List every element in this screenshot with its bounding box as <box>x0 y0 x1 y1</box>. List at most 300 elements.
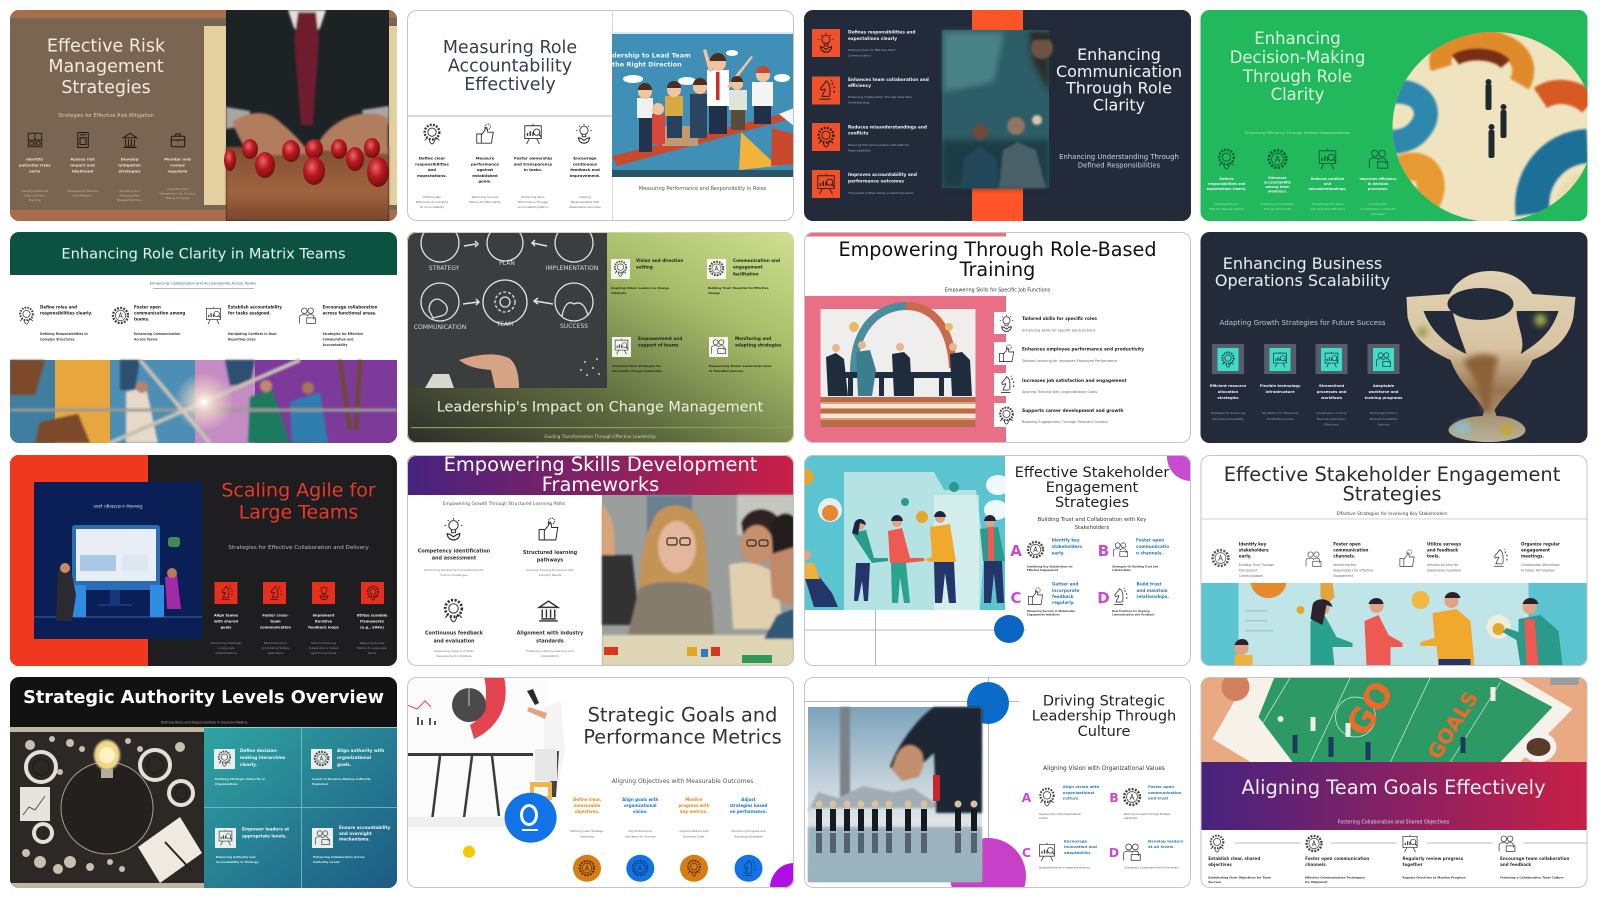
chalkboard image: SUCCESS <box>560 323 588 330</box>
key points: expectations. <box>417 173 447 178</box>
slide: Driving Strategic Leadership Through Culture <box>804 677 1191 900</box>
title: Effectively <box>464 75 556 95</box>
slide: Effective Risk Management Strategies <box>10 10 397 221</box>
key points: culture <box>1063 796 1079 801</box>
key points: Communication and <box>733 258 780 263</box>
icons <box>445 518 558 622</box>
captions: Considerations in Decision <box>1360 207 1396 211</box>
captions: Challenges in Scaling <box>1317 411 1347 415</box>
icons <box>1219 149 1388 169</box>
slide: Leadership's Impact on Change Management <box>407 224 794 443</box>
key points: Gather and <box>1052 582 1078 586</box>
magenta circle accent <box>950 838 1026 900</box>
key points: tools. <box>1427 554 1440 558</box>
key points: Monitoring and <box>735 336 771 341</box>
title: Enhancing Role Clarity in Matrix Teams <box>61 246 346 262</box>
captions <box>416 196 601 208</box>
captions: Scalability Success <box>1267 417 1294 421</box>
key points: measurable <box>574 803 600 808</box>
captions: Collaboration <box>1112 568 1131 572</box>
subtitle: Guiding Transformation Through Effective Leadership <box>544 434 656 439</box>
captions: Building Trust: Essential for Effective <box>708 286 769 290</box>
key points <box>848 30 929 184</box>
captions: Monitoring Progress and <box>732 829 766 833</box>
captions <box>611 286 771 373</box>
key points: allocation <box>1218 390 1239 394</box>
title: Through Role <box>1065 78 1172 98</box>
captions: Effectively <box>1324 422 1339 426</box>
captions: Risk Mitigation <box>73 194 93 198</box>
captions: Aligning Training with Organizational Goals <box>1022 390 1097 394</box>
captions: The Impact of Role Clarity on Team Dynamics <box>847 191 914 195</box>
key points: setting <box>636 264 653 270</box>
captions: Successful Change Leadership <box>612 369 662 373</box>
slide: Enhancing Decision-Making Through Role Clarity <box>1200 10 1590 225</box>
subtitle: Empowering Skills for Specific Job Functions <box>945 288 1051 294</box>
key points: early. <box>1052 550 1065 556</box>
icons <box>425 124 592 144</box>
key points: making hierarchies <box>240 755 286 760</box>
key points: processes. <box>1368 187 1388 191</box>
key points: responsibilities <box>415 161 450 166</box>
key points: Establish accountability <box>228 304 282 310</box>
globe badge <box>505 793 557 843</box>
key points: Define clear <box>419 156 445 160</box>
key points: efficiency <box>848 83 871 89</box>
captions <box>215 777 371 864</box>
key points: and <box>428 167 436 172</box>
captions: Responsibilities <box>848 148 871 152</box>
letters: C <box>1010 589 1022 607</box>
key points: conflicts <box>848 131 869 137</box>
key points: among team <box>1266 185 1290 189</box>
key points: Foster open <box>134 304 161 310</box>
key points: Defines responsibilities and <box>848 30 915 36</box>
icon tiles <box>812 29 840 198</box>
key points: Continuous feedback <box>425 630 484 636</box>
subtitle: Building Trust and Collaboration with Key <box>1038 517 1146 523</box>
title: Operations Scalability <box>1215 271 1390 290</box>
captions: Responsibilities with <box>571 200 599 204</box>
illustration: goals football pitch: GO <box>1338 674 1403 744</box>
captions <box>1238 563 1560 578</box>
captions: Catalysts <box>611 291 626 295</box>
key points: Streamlined <box>1319 384 1345 388</box>
letters: D <box>1097 589 1110 607</box>
captions: in Large Agile <box>217 646 235 650</box>
key points: channels. <box>1333 554 1356 558</box>
icon tiles <box>214 582 384 604</box>
key points: Empower leaders at <box>242 826 289 832</box>
key points: innovation and <box>1064 844 1097 849</box>
captions: Performance Through <box>518 200 548 204</box>
slide: Enhancing Role Clarity in Matrix Teams <box>10 232 397 443</box>
key points: at all levels <box>1148 844 1174 849</box>
key points: Enhances <box>1268 176 1287 180</box>
letters: B <box>1109 790 1119 805</box>
title: Aligning Team Goals Effectively <box>1241 776 1546 799</box>
captions: Change <box>708 291 720 295</box>
title: Enhancing <box>1077 45 1161 64</box>
subtitle: Enhancing Collaboration and Accountability Across Teams <box>150 282 256 286</box>
key points: continuous <box>573 161 598 166</box>
subtitle: Empowering Growth Through Structured Learning Paths <box>443 501 566 507</box>
icons <box>219 751 330 845</box>
key points: regularly. <box>1052 600 1075 605</box>
captions: with Clear Role Definitions <box>1310 207 1346 211</box>
key points: stakeholders <box>1052 544 1083 549</box>
key points: Encourage <box>573 156 597 160</box>
key points: team <box>270 620 281 624</box>
captions: Enhancing Skills for Specific Job Functions <box>1022 328 1096 332</box>
captions: Management Plans <box>117 198 143 202</box>
key points: Alignment with industry <box>517 630 584 636</box>
key points: frameworks <box>360 620 384 624</box>
key points: meetings. <box>1521 554 1544 558</box>
key points: feedback loops <box>308 626 339 630</box>
captions: Measuring Impact of Skills <box>434 649 474 653</box>
key points: Adjust <box>741 797 756 802</box>
captions: Cultivating a Collaborative Work Environment <box>1124 866 1179 870</box>
key points: Develop leaders <box>1148 838 1184 844</box>
key points: Reduces conflicts <box>1311 177 1344 181</box>
key points: objectives. <box>575 809 600 814</box>
key points: strategies based <box>730 803 768 808</box>
title: Strategic Authority Levels Overview <box>23 688 384 708</box>
title: Strategies <box>61 78 151 98</box>
key points: in tasks. <box>524 167 543 172</box>
captions: Building Trust Through <box>1239 563 1274 567</box>
key points <box>636 258 782 348</box>
captions: Aligning Training Programs with <box>526 568 574 572</box>
captions: Fostering Lifelong Learning and <box>526 649 574 653</box>
blue circle accent <box>967 682 1009 724</box>
icons <box>221 586 378 600</box>
key points: relationships. <box>1136 594 1169 599</box>
key points: Establish clear, shared <box>1208 856 1260 861</box>
captions: Inspiring Vision: Leaders as Change <box>611 286 669 290</box>
caption: Measuring Performance and Responsibility in Roles <box>639 186 767 192</box>
captions: Tailored Learning for Improved Employee Performance <box>1021 359 1117 363</box>
captions: Defining Roles for Effective Team <box>848 48 896 52</box>
captions: Industry Needs <box>539 573 562 577</box>
photo: team at table <box>602 495 794 666</box>
captions: Communication Strategies for <box>612 364 661 368</box>
key points: clearly. <box>240 762 257 767</box>
key points: early <box>29 168 41 173</box>
letters: B <box>1098 542 1109 560</box>
captions <box>1208 876 1564 884</box>
captions: Navigating Conflicts in Dual <box>228 332 277 336</box>
captions: Indicators for Success <box>625 834 656 838</box>
captions: Business Goals <box>683 834 705 838</box>
captions: Planning <box>29 198 41 202</box>
key points: Assess risk <box>70 156 95 162</box>
captions: Involving Role <box>1369 202 1388 206</box>
trophy-shaped photo <box>1406 271 1576 442</box>
captions <box>1027 564 1158 616</box>
key points: Utilize surveys <box>1427 542 1462 546</box>
title: Accountability <box>448 56 572 76</box>
key points: Define decision- <box>240 748 278 753</box>
key points: against <box>477 167 493 172</box>
captions: Adjusting Strategies <box>734 834 763 838</box>
key points: stakeholders <box>1239 548 1269 552</box>
captions: Measuring Success in Stakeholder <box>1027 609 1076 613</box>
key points: Foster open <box>1333 542 1361 546</box>
captions: Utilizing Surveys for <box>1427 563 1459 567</box>
key points: organizational <box>337 755 372 760</box>
captions <box>1211 411 1398 426</box>
captions: Communication <box>848 54 871 58</box>
key points: Align authority with <box>337 748 384 753</box>
key points: potential risks <box>19 162 51 167</box>
key points: Flexible technology <box>1260 384 1301 388</box>
key points: mechanisms. <box>339 836 370 842</box>
key points: regularly <box>168 168 188 173</box>
captions <box>1021 328 1117 424</box>
captions: Reporting Lines <box>228 338 256 342</box>
captions <box>211 641 387 655</box>
key points <box>19 158 190 173</box>
captions: Engagement Initiatives <box>1027 612 1060 616</box>
key points <box>1239 542 1560 558</box>
captions: Enhancing Team <box>522 195 545 199</box>
captions: Establishing Clear Objectives for Team <box>1208 876 1271 880</box>
key points: progress with <box>678 803 710 808</box>
title: Empowering Through Role-Based <box>838 238 1157 261</box>
key points: Defines <box>1219 177 1234 181</box>
key points: Foster open communication <box>1305 856 1369 861</box>
captions: in Transition Success <box>709 369 744 373</box>
key points: Organize regular <box>1521 542 1560 546</box>
icons <box>1213 549 1507 566</box>
key points: training programs <box>1365 396 1403 400</box>
captions: to Foster Participation <box>1521 568 1555 572</box>
key points: workflows <box>1321 396 1343 400</box>
key points: likelihood <box>72 168 93 173</box>
captions: Effective Engagement <box>1027 568 1059 572</box>
key points: and maintain <box>1136 588 1168 593</box>
captions: Enhancing Accountability <box>1260 202 1295 206</box>
key points <box>1208 856 1569 867</box>
corner accent <box>1167 433 1215 481</box>
subtitle: Enhancing Efficiency Through Defined Responsibilities <box>1245 130 1350 135</box>
slide: Enhancing Business Operations Scalability <box>1200 232 1588 443</box>
captions: Authority Levels <box>313 860 340 864</box>
captions: Defining Responsibilities in <box>40 332 88 336</box>
icons <box>1222 352 1391 367</box>
title: Clarity <box>1093 96 1145 114</box>
icons <box>1211 835 1515 852</box>
letters: A <box>1010 542 1022 560</box>
key points: Encourage collaboration <box>322 304 378 310</box>
key points: Supports career development and growth <box>1022 408 1123 414</box>
key points: Identify <box>26 156 44 162</box>
key points: (e.g., SAFe) <box>360 626 384 630</box>
captions: Aligning <box>579 195 591 199</box>
title: Scaling Agile for <box>221 480 376 502</box>
key points: performance <box>471 161 499 166</box>
key points: Improves efficiency <box>1359 177 1397 181</box>
image: team on ladders <box>10 360 397 443</box>
slide: Strategic Authority Levels Overview <box>10 677 397 888</box>
image: concept board <box>10 727 204 888</box>
key points: strategies <box>1217 396 1239 400</box>
key points: and transparency <box>514 161 553 166</box>
key points: members. <box>1268 190 1287 194</box>
key points: misunderstandings. <box>1308 187 1347 191</box>
key points: in decision <box>1368 182 1389 186</box>
captions: Best Practices for <box>264 641 288 645</box>
slide: Empowering Through Role-Based Training <box>804 232 1191 443</box>
key points <box>415 156 601 184</box>
key points: Empowerment and <box>638 336 682 341</box>
captions: Agile Teams <box>268 651 284 655</box>
key points: Enhances employee performance and productivity <box>1022 346 1144 352</box>
key points: on performance. <box>730 809 768 814</box>
captions: Metrics for Large Agile <box>357 646 387 650</box>
title: Culture <box>1078 724 1130 740</box>
captions: Complex Structures <box>40 338 75 342</box>
title: Leadership Through <box>1032 708 1176 724</box>
captions: Collaboration in Scaled <box>309 646 339 650</box>
subtitle: Fostering Collaboration and Shared Objectives <box>1338 820 1450 826</box>
key points: responsibilities and <box>1208 182 1246 186</box>
icons <box>818 33 834 194</box>
key points <box>1207 176 1397 194</box>
photo: hands and red spheres <box>224 10 389 221</box>
title: Effective Stakeholder <box>1015 465 1169 481</box>
photo: leader placing red figure <box>808 707 982 882</box>
key points: Improves accountability and <box>848 172 917 178</box>
key points: engagement <box>733 264 763 270</box>
key points: feedback <box>1052 594 1074 599</box>
key points: feedback and <box>570 167 600 172</box>
key points: Align vision with <box>1063 784 1099 789</box>
header <box>10 232 397 275</box>
captions: Business Scalability <box>1370 417 1398 421</box>
key points: standards <box>536 638 564 644</box>
key points: teams. <box>134 316 150 322</box>
key points: and assessment <box>432 556 477 562</box>
key points: Monitor <box>685 797 703 802</box>
key points: across functional areas. <box>322 310 377 316</box>
title: Enhancing <box>1254 29 1341 48</box>
key points: iterative <box>315 620 333 624</box>
title: Communication <box>1056 62 1182 81</box>
captions: Aligning Metrics with <box>679 829 709 833</box>
slide: Empowering Skills Development Frameworks <box>407 453 794 666</box>
captions: Understanding <box>848 100 869 104</box>
key points: incorporate <box>1052 588 1080 593</box>
captions: Reducing Miscommunication with Defined <box>848 143 909 147</box>
captions: Explained <box>312 782 328 786</box>
key points: mitigation <box>118 162 141 167</box>
slide: Effective Stakeholder Engagement Strategies (band) <box>1200 455 1588 666</box>
key points: vision. <box>633 809 648 814</box>
key points: Foster open <box>1136 538 1164 542</box>
captions <box>847 48 914 195</box>
key points: infrastructure <box>1266 390 1295 394</box>
key points: organizational <box>624 803 657 808</box>
key points <box>1022 316 1144 414</box>
key points: Define clear, <box>573 797 601 802</box>
slide: Scaling Agile for Large Teams <box>10 455 397 666</box>
key points: impact and <box>70 162 95 167</box>
icon tiles <box>214 749 333 848</box>
captions: Integrating Risk <box>167 187 189 191</box>
captions: Strategies for Enhancing <box>1211 411 1246 415</box>
captions: Monitoring and <box>119 189 140 193</box>
captions: Stakeholder Feedback <box>1427 568 1461 572</box>
key points: and oversight <box>339 831 372 836</box>
subtitle: Stakeholders <box>1075 525 1109 531</box>
key points: Monitor and <box>164 156 191 162</box>
captions: Making Processes <box>166 196 190 200</box>
captions: Enhancing Workforce Competencies for <box>424 568 484 572</box>
subtitle: Enhancing Understanding Through <box>1059 153 1179 161</box>
captions: Empowering Teams: Leadership's Role <box>709 364 771 368</box>
icon frames <box>1212 344 1400 374</box>
captions: Teams <box>368 651 377 655</box>
chalkboard image: STRATEGY <box>429 265 460 272</box>
title: Training <box>959 258 1035 281</box>
captions: Key Performance <box>628 829 652 833</box>
captions: Collaboration and <box>322 338 354 342</box>
key points: Increases job satisfaction and engagement <box>1022 378 1127 384</box>
captions: Identifying Potential <box>21 189 48 193</box>
key points: communicatio <box>1136 544 1169 549</box>
captions: Aligning Vision with Organizational <box>1039 813 1081 816</box>
key points: goals. <box>478 178 492 184</box>
captions: Defining Key <box>423 195 441 199</box>
captions: Effective Decision-Making <box>1209 207 1244 211</box>
captions: Accountability Metrics <box>518 205 549 209</box>
key points: Define roles and <box>40 304 77 310</box>
title: Clarity <box>1271 85 1325 104</box>
captions: Boosting Engagement Through Relevant Content <box>1022 420 1108 424</box>
title: Strategies <box>1342 482 1442 506</box>
icon tiles <box>1218 348 1394 371</box>
captions: Measurable Outcomes <box>569 205 601 209</box>
captions: Technology's Role in <box>1368 411 1398 415</box>
key points: responsibilities clearly. <box>40 310 93 316</box>
captions <box>424 568 574 658</box>
key points: facilitation <box>733 272 759 276</box>
chalkboard image: PLAN <box>499 260 515 267</box>
subtitle: Aligning Objectives with Measurable Outcomes <box>612 778 753 785</box>
captions: Enhancing Collaboration Through Clear Role <box>848 95 912 99</box>
title: Strategic Goals and <box>588 704 777 726</box>
captions: Performance Indicators <box>416 200 449 204</box>
captions: Engagement <box>1333 574 1354 578</box>
captions: Implementations <box>215 651 238 655</box>
captions: Strategies for Effective <box>67 189 98 193</box>
captions: Key Metrics for Measuring <box>1262 411 1298 415</box>
icons <box>580 860 755 876</box>
key points: Encourage team collaboration <box>1500 856 1569 861</box>
subtitle: Adapting Growth Strategies for Future Success <box>1220 318 1386 327</box>
icons <box>999 315 1014 424</box>
subtitle: Strategies for Effective Risk Mitigation <box>58 113 154 119</box>
key points <box>1210 384 1403 400</box>
captions <box>1209 203 1396 215</box>
key points: and feedback <box>1500 862 1531 867</box>
photo: blurred business people <box>942 30 1053 188</box>
captions: Regular Check-Ins to Monitor Progress <box>1402 876 1466 880</box>
title: Performance Metrics <box>583 726 782 748</box>
